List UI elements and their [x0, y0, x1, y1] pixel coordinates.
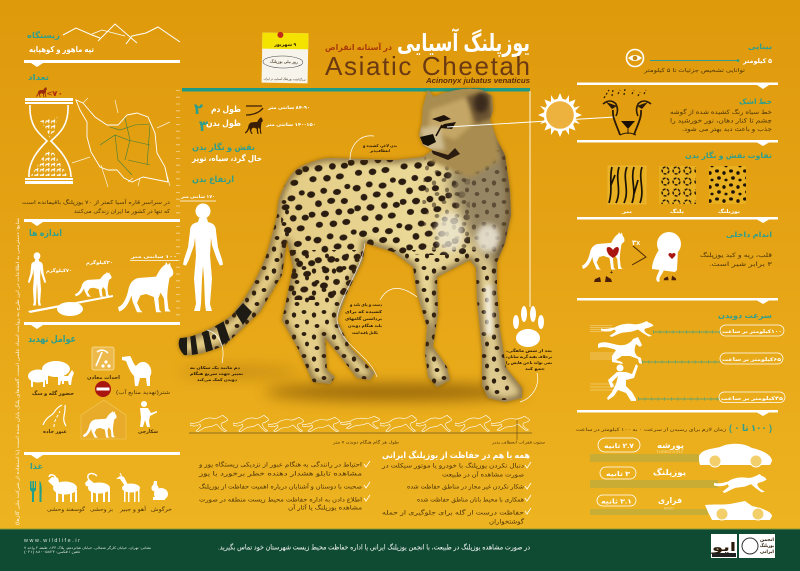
- dotted distance lines: [638, 332, 720, 399]
- threats section: شکارچی: [138, 429, 158, 435]
- callout: paw: جمع کند: [525, 366, 545, 371]
- species facts: خال گرد، سیاه، توپر: [191, 153, 262, 163]
- callout: body: [362, 143, 398, 153]
- internal organs section: اندام داخلی: [726, 230, 772, 239]
- speed section: [590, 311, 785, 402]
- footer: در صورت مشاهده یوزپلنگ در طبیعت، با انجمن یوزپلنگ ایرانی یا اداره حفاظت محیط زیست شهرستان خود تماس بگیرید.: [218, 542, 530, 552]
- divider: [24, 322, 180, 329]
- icon: cheetah body: [245, 117, 263, 134]
- icon: fork and knife: [30, 481, 42, 502]
- speed pills: [719, 325, 785, 402]
- conservation tips right: حفاظت درست از گله برای جلوگیری از حمله: [382, 508, 524, 516]
- main cheetah illustration: [170, 80, 530, 410]
- icon: greater than: [632, 246, 646, 265]
- food labels: گوسفند وحشی: [47, 506, 85, 513]
- callout: tail: تغییر جهت سریع هنگام: [190, 371, 244, 376]
- sizes section: ۷۰کیلوگرم: [46, 267, 72, 274]
- conservation tips left: [198, 460, 370, 512]
- icon: ibex: [85, 473, 110, 502]
- right column: [576, 42, 785, 520]
- threats section: عبور جاده: [43, 429, 67, 435]
- callout: legs: کشیده که برای: [345, 309, 383, 314]
- species facts: طول دم: [211, 104, 241, 115]
- habitat section: [27, 24, 180, 54]
- species facts: ۱۴۰-۱۵۰ سانتی متر: [265, 122, 316, 127]
- food labels: بز وحشی: [90, 507, 114, 513]
- food labels: آهو و جبیر: [119, 506, 147, 513]
- coat patterns section: پلنگ: [670, 208, 684, 215]
- body spots: [280, 160, 470, 300]
- icon: camel: [122, 356, 151, 386]
- conservation tips right: صورت مشاهده آن در طبیعت: [442, 470, 524, 478]
- sizes section: [28, 228, 178, 316]
- conservation tips left: مشاهده یوزپلنگ یا آثار آن: [288, 502, 362, 512]
- acceleration section: [576, 423, 772, 520]
- callout: paw: بعد از شش ماهگی،: [506, 348, 553, 353]
- conservation tips right: دنبال نکردن یوزپلنگ با خودرو یا موتور سیکلت در: [381, 462, 524, 470]
- speed lines: [590, 326, 616, 390]
- sticky note: ۹ شهریور: [273, 42, 296, 47]
- icon: hourglass: [25, 98, 73, 184]
- tail rings: [178, 303, 252, 356]
- footer: www.wildlife.ir: [23, 538, 82, 544]
- footer: نشانی: تهران، خیابان کارگر شمالی، خیابان شانزدهم، پلاک ۱۳۴، طبقه ۲ واحد ۷: [24, 545, 151, 550]
- population section: [28, 73, 63, 98]
- vision section: ۵ کیلومتر: [742, 58, 772, 65]
- species facts: [180, 101, 316, 311]
- coat patterns section: یوزپلنگ: [718, 208, 740, 215]
- icon: no entry: [95, 381, 111, 397]
- coat patterns section: تفاوت نقش و نگار بدن: [685, 151, 772, 160]
- divider: [577, 82, 778, 89]
- callouts: [207, 136, 538, 402]
- internal organs section: ۳x: [632, 240, 640, 247]
- gait stride diagram: ستون فقرات انعطاف پذیر: [491, 440, 546, 444]
- callout: body: انعطاف‌پذیر: [369, 148, 390, 153]
- conservation tips right: [381, 462, 531, 526]
- species facts: نقش و نگار بدن: [192, 142, 255, 153]
- icon: road: [43, 405, 66, 427]
- species facts: ۸۴-۹۰ سانتی متر: [267, 105, 310, 110]
- tear line section: [670, 97, 772, 133]
- scientific name: Acinonyx jubatus venaticus: [425, 76, 530, 85]
- conservation tips left: صحبت با دوستان و آشنایان درباره اهمیت حفاظت از یوزپلنگ: [199, 482, 362, 490]
- footer: تلفن / فکس: ۸۸۰۰۵۸۲۴ (۰۲۱): [24, 550, 80, 554]
- tear line section: چشم تا کنار دهان، نور خورشید را: [670, 118, 772, 124]
- coat patterns section: [608, 151, 772, 215]
- internal organs section: قلب، ریه و کبد یوزپلنگ: [700, 251, 772, 259]
- icon: gazelle: [116, 473, 140, 502]
- speed section: سرعت دویدن: [718, 311, 772, 320]
- habitat section: تپه ماهور و کوهپایه: [29, 45, 94, 54]
- sticky note: روز ملی یوزپلنگ: [270, 59, 298, 64]
- callout: legs: دست و پای بلند و: [349, 302, 382, 307]
- conservation tips left: احتیاط در رانندگی به هنگام عبور از نزدیکی زیستگاه یوز و: [198, 460, 362, 468]
- icon: human silhouette: [183, 204, 223, 311]
- sizes section: ۳۰کیلوگرم: [86, 259, 113, 266]
- logos: ایو: [711, 540, 736, 555]
- sticky note: [262, 32, 308, 83]
- conservation tips left: اطلاع دادن به اداره حفاظت محیط زیست منطقه در صورت: [199, 496, 362, 504]
- threats section: حضور گله و سگ: [32, 390, 74, 397]
- row: Porsche: TURBO 9.911: [656, 450, 683, 454]
- population paragraph: در سراسر قاره آسیا کمتر از ۷۰ یوزپلنگ باقیمانده است: [22, 199, 171, 206]
- conservation heading: همه با هم در حفاظت از یوزپلنگ ایرانی: [382, 450, 530, 461]
- food labels: [47, 506, 172, 513]
- pattern: tiger: [608, 166, 646, 204]
- species facts: طول بدن: [206, 118, 241, 129]
- population paragraph: که تنها در کشور ما ایران زندگی می‌کنند: [74, 208, 170, 215]
- threats section: شتر(تهدید منابع آب): [116, 389, 170, 396]
- row: cheetah: یوزپلنگ: [653, 467, 686, 477]
- title block: [262, 28, 530, 85]
- head: [415, 85, 500, 178]
- icon: cheetah with heart: +: [610, 270, 613, 276]
- species facts: ۳: [199, 118, 208, 135]
- icon: horse: [598, 337, 642, 364]
- sticky note: بزرگداشت یوزپلنگ آسیایی در ایران: [264, 77, 306, 81]
- vision section: توانایی تشخیص جزئیات تا ۵ کیلومتر: [643, 67, 746, 74]
- divider: [577, 410, 778, 416]
- vertical source note: منابع: دسترسی به اطلاعات در این طرح به روایت اسناد علمی است، گفته‌های پلنگ بایان شده است (با استفاده از شرکت ملی گازها): [14, 217, 20, 525]
- callout: tail: دویدن کمک می‌کند: [197, 377, 237, 382]
- divider: [577, 140, 778, 146]
- icon: hunter: [140, 401, 157, 427]
- divider: [24, 60, 180, 67]
- tear line section: خط سیاه رنگ کشیده شده از گوشه: [670, 108, 772, 116]
- conservation tips left: مشاهده تابلو هشدار دهنده خطر برخورد با یوز: [198, 470, 362, 478]
- footer: [0, 528, 800, 571]
- sizes section: اندازه ها: [29, 228, 62, 239]
- callout: paw: برخلاف بقیه گربه سانان،: [506, 354, 552, 359]
- threats section: [28, 334, 170, 439]
- icon: running cheetah: [601, 321, 653, 337]
- subtitle: در آستانه انقراض: [325, 42, 392, 53]
- callout: legs: تکامل یافته است: [352, 330, 378, 335]
- food section: غذا: [30, 462, 43, 471]
- population section: <۷۰: [47, 89, 63, 98]
- threats section: احداث معادن: [87, 375, 120, 381]
- gait stride diagram: طول هر گام هنگام دویدن ۷ متر: [332, 440, 399, 444]
- internal organs section: ۳ برابر شیر است.: [709, 261, 773, 268]
- icon: sheep and dog: [28, 361, 74, 387]
- English title: Asiatic Cheetah: [325, 51, 530, 81]
- edge shading: [179, 89, 522, 402]
- callout: body: بدن لاغر، کشیده و: [362, 143, 398, 148]
- map of Iran: [72, 98, 170, 187]
- row: Ferrari: [597, 495, 772, 520]
- icon: wild sheep: [48, 475, 77, 502]
- icon: cheetah face: [603, 89, 651, 135]
- icon: lion with heart: [652, 232, 681, 282]
- speed section: ۱۰۰کیلومتر بر ساعت: [722, 329, 782, 335]
- callout: paw: [506, 348, 553, 371]
- species facts: ۲: [194, 101, 203, 118]
- vision section: بینایی: [748, 42, 772, 51]
- acceleration section: زمان لازم برای رسیدن از سرعت ۰ به ۱۰۰ کیلومتر در ساعت: [576, 427, 726, 432]
- icon: runner: [607, 364, 638, 401]
- speed lines: [590, 455, 718, 514]
- row: Ferrari: ۳.۱ ثانیه: [601, 498, 632, 506]
- tear line section: خط اشک: [739, 97, 772, 106]
- teal title bar: [182, 88, 530, 92]
- speed section: ۴۵کیلومتر بر ساعت: [721, 396, 783, 402]
- icon: mines: [92, 347, 114, 370]
- icon: sun: [538, 93, 582, 137]
- icon: eye: [626, 50, 644, 66]
- habitat section: زیستگاه: [27, 30, 60, 40]
- threats section: عوامل تهدید: [28, 334, 76, 345]
- icon: tail: [246, 106, 263, 115]
- leader lines: [447, 91, 615, 307]
- pattern: cheetah: [709, 166, 746, 204]
- internal organs section: [582, 230, 773, 282]
- gait stride diagram: [189, 415, 546, 444]
- conservation tips right: گوشتخواران: [489, 518, 524, 526]
- species facts: ارتفاع بدن: [192, 174, 234, 185]
- logos: یوزپلنگ: [760, 543, 774, 548]
- divider: [24, 219, 180, 226]
- row: Ferrari: فراری: [658, 496, 682, 505]
- logos: انجمن: [760, 537, 774, 542]
- callout: legs: بلند هنگام دویدن: [348, 323, 383, 328]
- population paragraph: [22, 199, 171, 215]
- species facts: ۱۷۰ سانتی متر: [180, 194, 215, 199]
- vision section: [626, 42, 772, 74]
- coat patterns section: ببر: [621, 209, 632, 215]
- sizes section: ۱۰۰ سانتی متر: [130, 254, 177, 259]
- food section: [30, 462, 172, 513]
- icon: cheetah with heart: [582, 232, 624, 282]
- acceleration section: ( ۱۰۰ تا ۰ ): [729, 423, 772, 433]
- conservation tips right: شکار نکردن غیر مجاز در مناطق حفاظت شده: [407, 484, 524, 490]
- row: Ferrari: ENZO: [664, 506, 674, 510]
- pattern: leopard: [659, 166, 696, 204]
- callout: tail: [190, 365, 244, 382]
- Persian title: یوزپلنگ آسیایی: [397, 28, 530, 57]
- left column: [14, 24, 180, 525]
- callout: legs: [345, 302, 383, 335]
- callout: tail: دم مانند یک سکان به: [190, 365, 240, 370]
- logos: ایرانی: [760, 549, 774, 554]
- icon: paw: [513, 306, 544, 347]
- row: Porsche: ۲.۷ ثانیه: [604, 443, 634, 450]
- row: Porsche: [598, 438, 772, 467]
- icon: house with cheetah: [81, 400, 126, 439]
- divider: [24, 452, 180, 459]
- speed section: ۶۵کیلومتر بر ساعت: [722, 357, 781, 363]
- ruler: [176, 90, 180, 318]
- food labels: خرگوش: [151, 506, 172, 513]
- callout: paw: نمی تواند ناخن هایش را: [506, 360, 552, 365]
- divider: [577, 298, 778, 304]
- row: cheetah: [600, 467, 766, 493]
- row: cheetah: ۳ ثانیه: [606, 471, 630, 478]
- row: Porsche: پورشه: [657, 441, 684, 450]
- callout: legs: برداشتن گامهای: [345, 316, 383, 321]
- logos: [711, 534, 775, 558]
- icon: rabbit: [151, 481, 168, 500]
- population section: تعداد: [28, 73, 49, 82]
- divider: [577, 217, 778, 223]
- conservation tips right: همکاری با محیط بانان مناطق حفاظت شده: [417, 496, 524, 504]
- tear line section: جذب و باعث دید بهتر می شود.: [682, 126, 772, 133]
